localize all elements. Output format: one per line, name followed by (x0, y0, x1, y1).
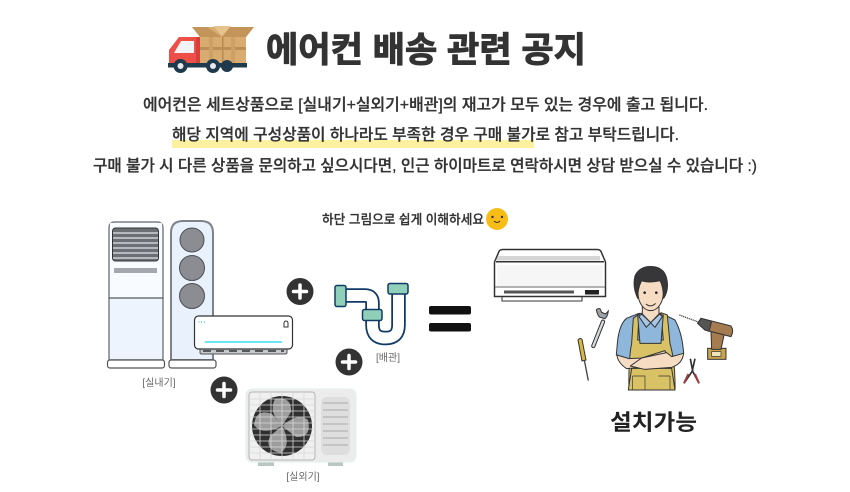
wrench (593, 322, 603, 346)
label: piping: [배관] (376, 352, 400, 364)
text block: notice: 에어컨은 세트상품으로 [실내기+실외기+배관]의 재고가 모두 있는 경우에 출고 됩니다. (143, 96, 708, 114)
text block: notice: 구매 불가 시 다른 상품을 문의하고 싶으시다면, 인근 하이마트로 연락하시면 상담 받으실 수 있습니다 :) (93, 157, 757, 175)
title: 에어컨 배송 관련 공지 (266, 31, 586, 70)
caption: see picture below: 하단 그림으로 쉽게 이해하세요 (322, 212, 484, 227)
label: indoor unit: [실내기] (142, 377, 176, 389)
screwdriver (584, 360, 588, 381)
highlight behind second line (172, 140, 534, 148)
illustration: outdoor unit (246, 389, 356, 466)
icon: delivery truck with boxes (168, 26, 254, 73)
icon: smiley (486, 208, 508, 230)
icon: equals sign (429, 306, 471, 332)
illustration: drain pipe (335, 284, 408, 338)
illustration: tower air conditioner (169, 221, 216, 368)
text block: notice: 해당 지역에 구성상품이 하나라도 부족한 경우 구매 불가로 참고 부탁드립니다. (172, 126, 679, 144)
label: outdoor unit: [실외기] (286, 471, 320, 483)
illustration: installed air conditioner (494, 250, 606, 301)
icon: plus two (336, 348, 362, 376)
technician (616, 267, 684, 390)
pliers (684, 359, 699, 383)
caption: installation possible: 설치가능 (610, 410, 697, 435)
illustration: technician with tools (578, 267, 733, 390)
text block: notice (93, 96, 757, 175)
illustration: floor standing air conditioner (108, 222, 164, 368)
power drill (679, 315, 698, 322)
icon: plus one (286, 278, 314, 305)
icon: plus three (210, 376, 238, 404)
illustration: wall mounted air conditioner (194, 316, 292, 354)
